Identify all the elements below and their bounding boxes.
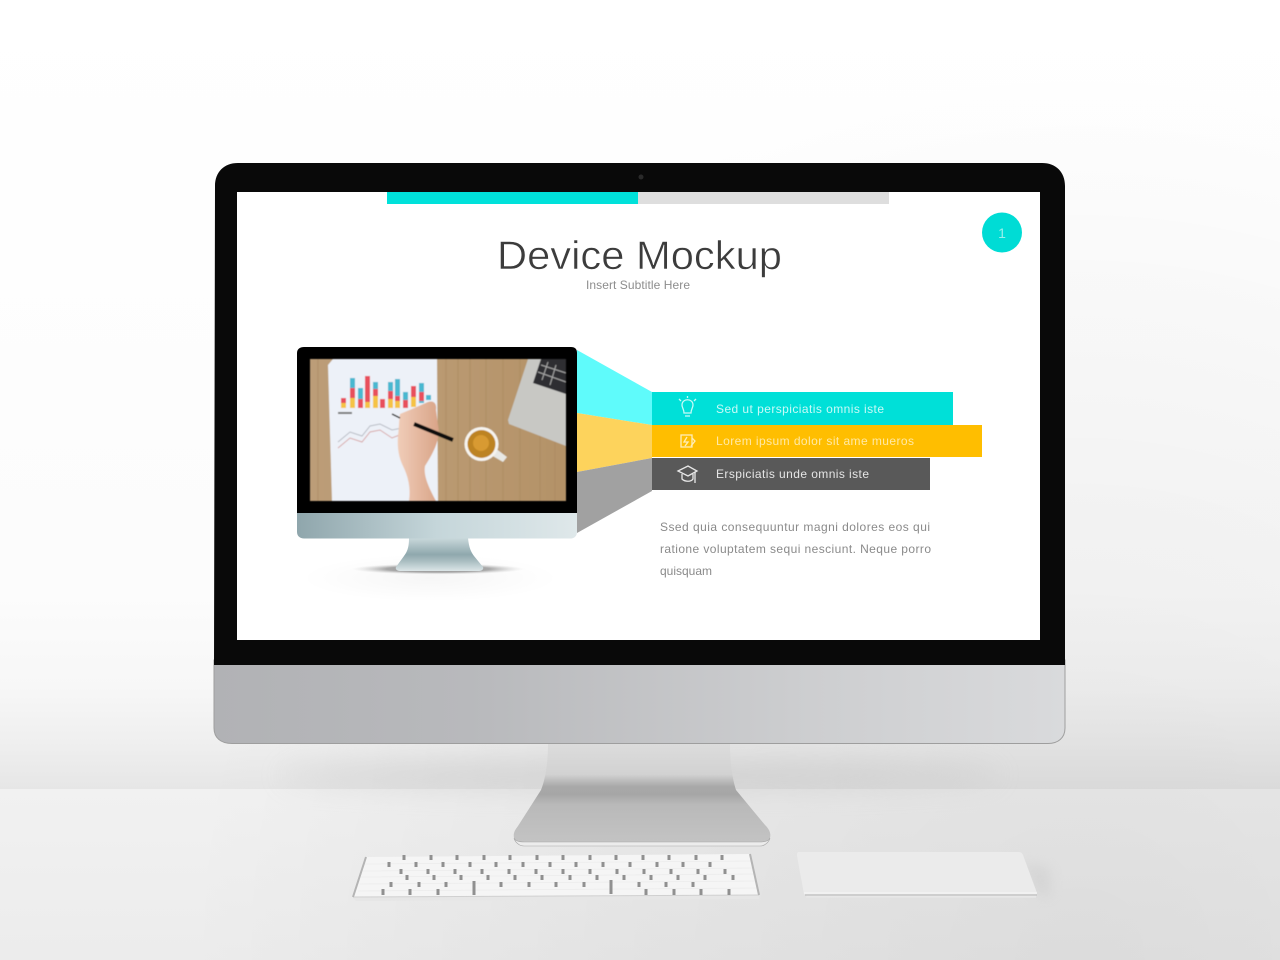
hand with pen — [398, 401, 439, 501]
body paragraph: ratione voluptatem sequi nesciunt. Neque porro — [660, 542, 931, 556]
list row: dark — [652, 458, 930, 490]
key gaps — [383, 855, 733, 895]
large monitor — [214, 163, 1065, 846]
mini monitor shadow — [352, 564, 524, 574]
photo: desk with chart — [310, 359, 566, 501]
top accent bar — [387, 192, 889, 204]
monitor stand — [514, 744, 770, 846]
webcam — [638, 174, 644, 180]
trackpad shadow — [1022, 862, 1052, 896]
body paragraph — [660, 520, 931, 578]
monitor chin — [214, 660, 1065, 744]
monitor shadow on wall — [280, 761, 1000, 789]
mini bezel — [297, 347, 577, 513]
icon: light bulb — [679, 396, 696, 416]
icon: graduation cap — [678, 466, 697, 483]
monitor bezel — [214, 163, 1065, 665]
slide screen — [237, 192, 1040, 640]
trackpad — [797, 852, 1052, 897]
list row: cyan: Sed ut perspiciatis omnis iste — [716, 402, 884, 416]
mini monitor glow — [300, 554, 560, 602]
list row: cyan — [652, 392, 953, 425]
paper — [328, 359, 438, 501]
desk surface — [0, 789, 1280, 960]
wood — [310, 359, 566, 501]
mini chin — [297, 512, 577, 538]
icon: edit note — [681, 435, 695, 447]
page number badge: 1 — [998, 225, 1006, 241]
line chart in photo — [338, 430, 402, 448]
list row: yellow — [652, 425, 982, 457]
keyboard — [353, 854, 759, 901]
list row: yellow: Lorem ipsum dolor sit ame mueros — [716, 434, 914, 448]
connector wedges — [577, 350, 652, 533]
body paragraph: Ssed quia consequuntur magni dolores eos qui — [660, 520, 930, 534]
coffee mug — [491, 448, 507, 462]
bar chart in photo — [341, 376, 431, 408]
mini monitor — [297, 347, 577, 602]
subtitle: Insert Subtitle Here — [586, 278, 690, 292]
list row: dark: Erspiciatis unde omnis iste — [716, 467, 869, 481]
body paragraph: quisquam — [660, 564, 712, 578]
mini stand — [396, 538, 483, 571]
laptop — [508, 359, 566, 446]
title: Device Mockup — [497, 234, 782, 278]
page number badge — [982, 212, 1022, 252]
